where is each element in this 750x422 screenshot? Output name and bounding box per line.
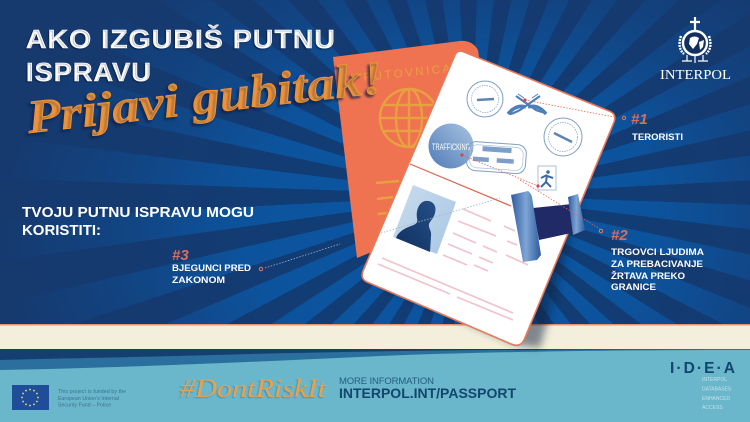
label 3 [172,247,252,285]
footer: teal band [0,348,750,422]
open passport pages [362,51,615,345]
subheading: KORISTITI: [22,223,101,239]
main heading: AKO IZGUBIŠ PUTNU [26,24,336,54]
label 2 [611,227,705,292]
IDEA logo: INTERPOL [702,377,727,383]
EU funding note: This project is funded by the [58,389,126,395]
stamp: trafficking: TRAFFICKING [432,142,470,152]
EU funding note [58,389,126,408]
passport cover title: PUTOVNICA [363,63,451,84]
label 1 [631,111,683,142]
IDEA logo: ACCESS [702,405,723,411]
label 2: ŽRTAVA PREKO [611,270,685,281]
label 1: #1 [631,111,648,128]
hashtag: #DontRiskIt [180,374,327,403]
emblem [680,17,710,63]
IDEA logo: DATABASES [702,386,732,392]
IDEA logo: I·D·E·A [670,360,735,377]
leader markers [259,98,626,271]
passport cover lines [376,181,399,214]
main heading [26,24,336,87]
label 2: #2 [611,227,628,244]
fold line [410,164,511,206]
stamp: trafficking [428,124,474,168]
passport globe emblem [380,89,438,147]
IDEA logo: ENHANCED [702,396,730,402]
stamp: round 2 [544,118,582,156]
icon: exit sign [538,166,556,190]
INTERPOL logo: INTERPOL [660,67,731,82]
stamp: rectangular [466,141,527,174]
script heading: Prijavi gubitak! [23,52,386,144]
orange passport behind [333,41,500,258]
text lines [378,209,528,320]
subheading [22,205,254,239]
label 3: ZAKONOM [172,275,225,285]
main heading: ISPRAVU [26,57,152,87]
footer: navy swoosh [0,348,750,370]
EU funding note: Security Fund – Police [58,402,111,408]
more information: MORE INFORMATION [339,376,434,387]
EU funding note: European Union's Internal [58,396,119,402]
page shadow [362,130,600,348]
label 2: ZA PREBACIVANJE [611,259,703,269]
label 1: TERORISTI [632,132,683,142]
INTERPOL logo [660,17,731,82]
subheading: TVOJU PUTNU ISPRAVU MOGU [22,205,254,221]
IDEA logo [670,360,735,411]
more information [339,376,516,401]
icon: crossed weapons [508,94,546,114]
EU flag [12,385,49,410]
label 2: GRANICE [611,282,656,292]
label 3: #3 [172,247,189,264]
dotted leader lines [265,100,614,268]
label 2: TRGOVCI LJUDIMA [611,247,705,257]
label 3: BJEGUNCI PRED [172,263,252,273]
cream band [0,324,750,349]
more information: INTERPOL.INT/PASSPORT [339,385,516,401]
rubber stamp [511,191,585,262]
stamp: round 1 [467,81,503,117]
photo [393,185,456,254]
silhouette [396,201,436,252]
